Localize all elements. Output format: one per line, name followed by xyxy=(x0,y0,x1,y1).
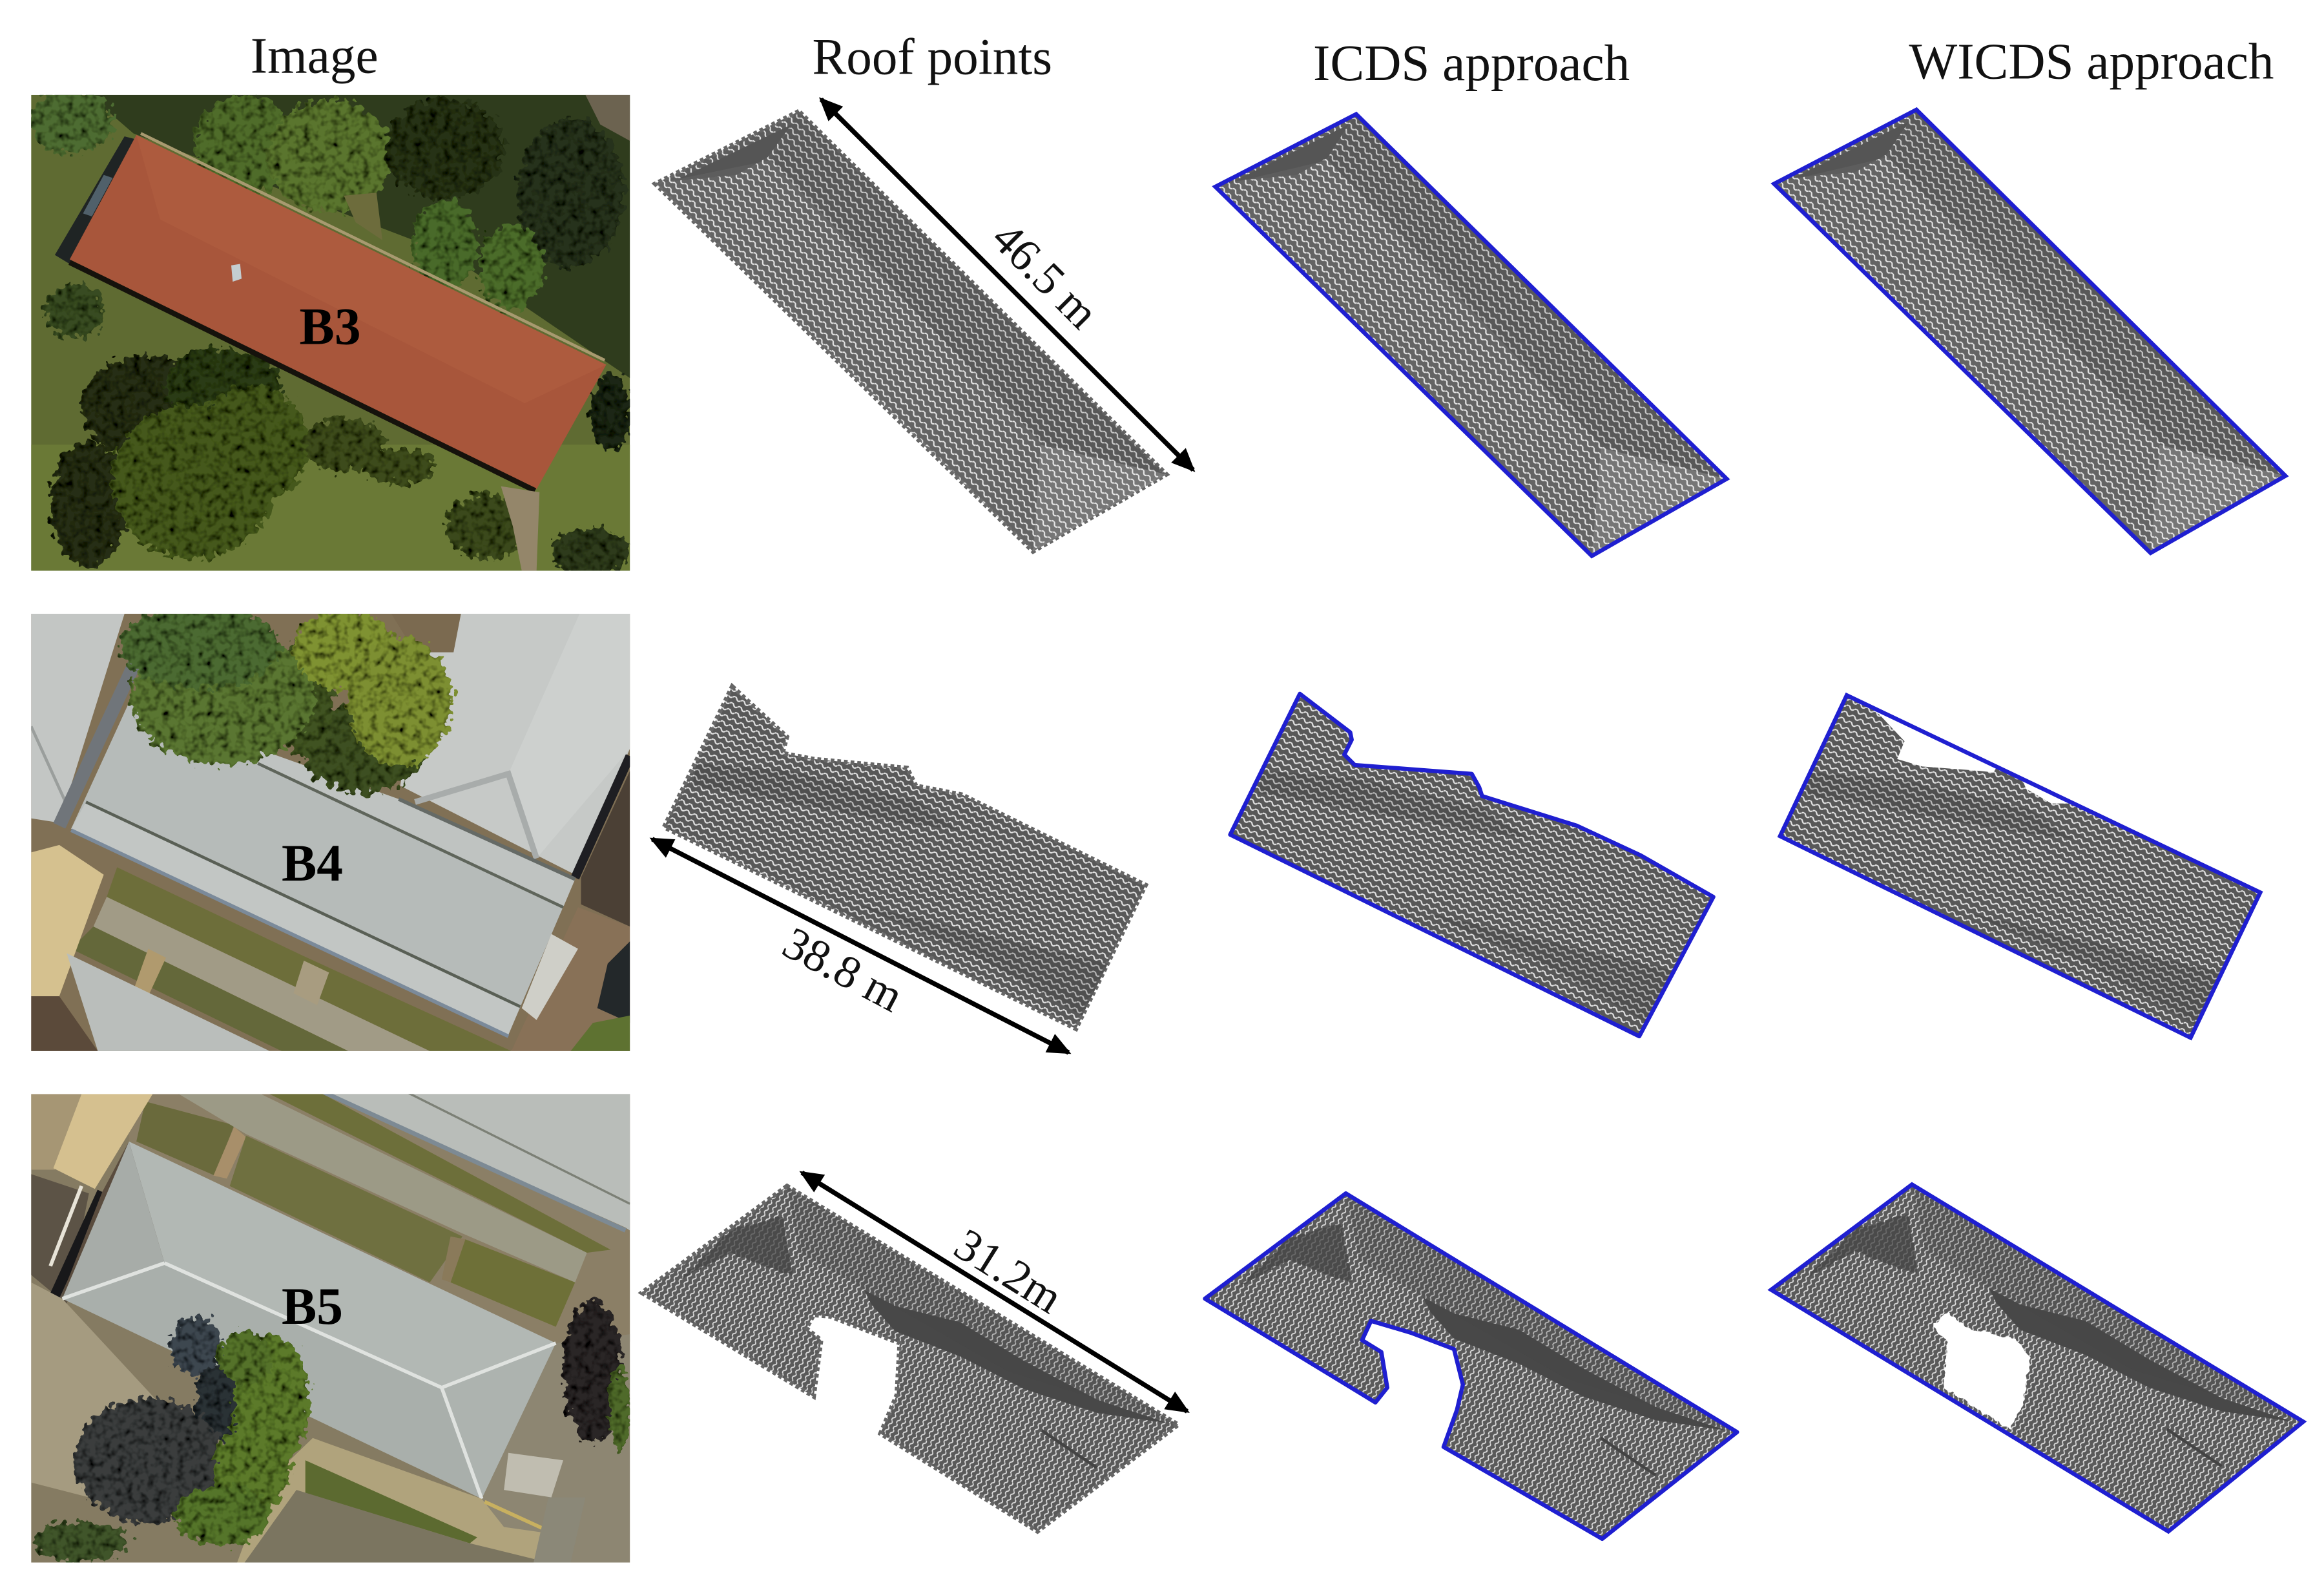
panel: aerial image B5 xyxy=(31,1093,630,1563)
arrow with length: 31.2m xyxy=(802,1173,1187,1411)
label: B5: B5 xyxy=(282,1277,343,1335)
heading: ICDS approach: ICDS approach xyxy=(1313,35,1630,92)
outline result: B4 WICDS xyxy=(1780,695,2260,1038)
outline result: B4 ICDS xyxy=(1230,694,1714,1036)
label: B3: B3 xyxy=(300,297,361,355)
outline result: B5 ICDS xyxy=(1205,1193,1737,1539)
arrow with length: 31.2m: 31.2m xyxy=(946,1219,1071,1323)
arrow with length: 46.5 m: 46.5 m xyxy=(982,213,1108,339)
panel: aerial image B4 xyxy=(31,605,630,1051)
label: B4: B4 xyxy=(282,833,343,892)
outline result: B5 WICDS xyxy=(1771,1184,2303,1531)
arrow with length: 38.8 m: 38.8 m xyxy=(774,917,911,1022)
point cloud: B4 roof points xyxy=(664,686,1146,1029)
point cloud: B5 roof points xyxy=(642,1186,1178,1531)
heading: WICDS approach: WICDS approach xyxy=(1909,34,2274,90)
outline result: B3 WICDS xyxy=(1774,110,2285,553)
outline result: B3 ICDS xyxy=(1216,114,1727,556)
arrow with length: 38.8 m xyxy=(652,839,1068,1052)
point cloud: B3 roof points xyxy=(655,111,1167,552)
panel: aerial image B3 xyxy=(30,89,632,575)
arrow with length: 46.5 m xyxy=(821,99,1193,470)
heading: Image: Image xyxy=(251,27,379,84)
heading: Roof points: Roof points xyxy=(812,29,1052,86)
